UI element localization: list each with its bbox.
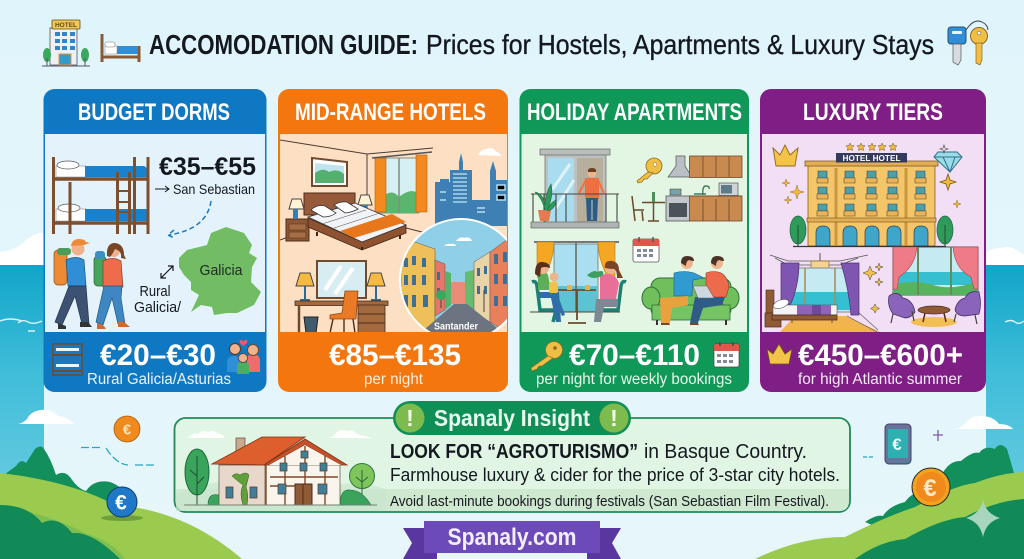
icon: hotel building: HOTEL: [55, 22, 77, 29]
label: Rural Galicia: [134, 283, 182, 316]
icon: phone with euro: €: [892, 435, 902, 454]
price: San Sebastian: San Sebastian: [173, 181, 255, 197]
map: Galicia: Galicia: [200, 263, 243, 279]
icon: city skyline: [435, 148, 507, 226]
panel: budget dorms: [44, 89, 266, 392]
insight text: in Basque Country.: [644, 440, 807, 463]
icon: crown: [773, 145, 798, 166]
icon: keys: [948, 21, 988, 65]
icon: phone with euro: [885, 424, 911, 464]
icon: blue euro coin: [107, 487, 137, 517]
icon: bed: [102, 34, 139, 62]
panel: Spanaly Insight: [174, 418, 850, 512]
insight text: [390, 440, 840, 510]
panel: luxury tiers: [760, 89, 986, 392]
price: rural Galicia: €20–€30: [100, 339, 216, 372]
price: luxury: €450–€600+: [798, 339, 963, 372]
insight text: LOOK FOR “AGROTURISMO”: [390, 440, 638, 463]
panel: mid-range hotels: [278, 89, 523, 392]
price: apartments: per night for weekly bookings: [536, 371, 732, 388]
badge: Spanaly Insight: !: [610, 405, 618, 431]
illustration: luxury bedroom: [765, 253, 880, 332]
icon: footer calendar: [714, 342, 739, 367]
price: rural Galicia: Rural Galicia/Asturias: [87, 371, 231, 388]
icon: small bunk bed: [53, 344, 82, 375]
illustration: Basque farmhouse: [176, 430, 386, 511]
icon: hotel building: [42, 20, 90, 66]
price: mid-range: [329, 339, 461, 388]
label: Rural Galicia: Rural: [140, 283, 170, 300]
price: luxury: for high Atlantic summer: [798, 371, 962, 388]
icon: orange euro coin: €: [123, 422, 132, 438]
ribbon: Spanaly.com: [403, 521, 621, 559]
icons: sparkles: [782, 145, 961, 208]
icon: gold key: [637, 158, 662, 183]
icon: backpackers: [54, 239, 130, 329]
heading: holiday apartments: HOLIDAY APARTMENTS: [527, 99, 742, 126]
dash marks: [863, 456, 873, 458]
price: rural Galicia: [87, 339, 231, 388]
icon: calendar: [633, 237, 659, 262]
arrow: double-headed: [161, 266, 173, 278]
heading: budget dorms: BUDGET DORMS: [78, 99, 230, 126]
heading: luxury tiers: LUXURY TIERS: [803, 99, 943, 126]
illustration: sea-view lounge: [863, 247, 980, 327]
illustration: hotel room: [280, 140, 507, 332]
label: Rural Galicia: Galicia/: [134, 299, 182, 316]
illustration: family at table: [530, 242, 626, 323]
illustration: kitchen: [632, 156, 742, 221]
price: mid-range: €85–€135: [329, 339, 461, 372]
icon: footer key: [531, 342, 562, 371]
illustration: balcony: [531, 149, 619, 228]
illustration: couple on sofa: [642, 256, 739, 325]
price: San Sebastian: [155, 153, 256, 197]
decorative marks: [933, 430, 943, 441]
insight text: Farmhouse luxury & cider for the price of 3-star city hotels.: [390, 465, 840, 485]
price: apartments: [536, 339, 732, 388]
title: [149, 29, 934, 60]
icon: double bed: [286, 193, 406, 250]
icon: diamond: [934, 152, 962, 172]
icon: window with curtains: [372, 152, 432, 213]
icon: desk with mirror, lamps and chair: [295, 261, 388, 333]
title: Prices for Hostels, Apartments & Luxury Stays: [426, 29, 934, 60]
icon: footer crown: [767, 344, 792, 364]
icon: gold euro coin: [912, 468, 950, 506]
arrow: dashed path: [81, 448, 155, 465]
illustration: Santander street: [399, 218, 507, 332]
insight text: Avoid last-minute bookings during festivals (San Sebastian Film Festival).: [390, 494, 829, 510]
badge: Spanaly Insight: Spanaly Insight: [434, 405, 590, 431]
price: San Sebastian: €35–€55: [159, 153, 256, 181]
icon: orange euro coin: [114, 416, 140, 442]
title: ACCOMODATION GUIDE:: [149, 29, 418, 60]
icon: blue euro coin: €: [115, 492, 127, 514]
price: luxury: [798, 339, 963, 388]
panel: holiday apartments: [520, 89, 749, 392]
arrow: dashed route: [168, 201, 211, 238]
heading: mid-range hotels: MID-RANGE HOTELS: [295, 99, 486, 126]
map: Galicia: [179, 227, 261, 315]
sign: hotel hotel: HOTEL HOTEL: [842, 153, 900, 163]
price: mid-range: per night: [364, 371, 424, 388]
badge: Spanaly Insight: [393, 401, 631, 435]
icon: family: [227, 340, 260, 374]
icon: gold euro coin: €: [923, 475, 937, 502]
icon: wall picture: [312, 158, 347, 186]
ribbon: Spanaly.com: Spanaly.com: [448, 524, 576, 551]
label: Santander: Santander: [434, 320, 478, 332]
price: apartments: €70–€110: [569, 339, 700, 372]
illustration: grand hotel: [790, 143, 953, 246]
icon: bunk bed: [53, 157, 148, 234]
badge: Spanaly Insight: !: [406, 405, 414, 431]
